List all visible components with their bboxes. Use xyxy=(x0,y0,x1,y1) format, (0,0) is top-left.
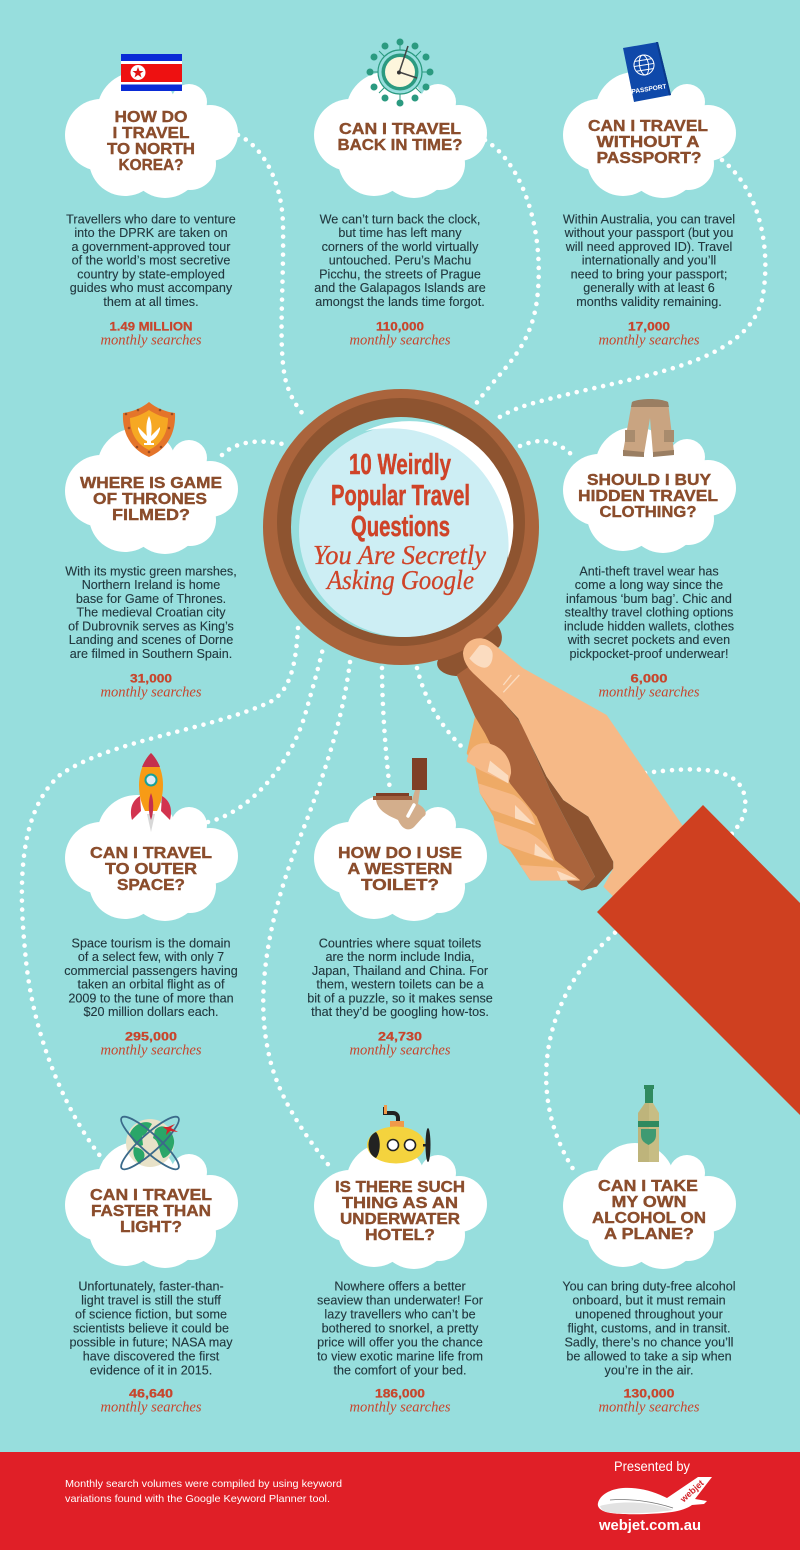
body text: untouched. Peru’s Machu xyxy=(329,254,471,268)
heading: WITHOUT A xyxy=(596,134,700,151)
cloud xyxy=(65,1142,238,1268)
red sleeve xyxy=(597,805,800,1115)
stat: 31,000 xyxy=(130,672,172,686)
handle shadow xyxy=(502,700,613,891)
body text: infamous ‘bum bag’. Chic and xyxy=(566,592,732,606)
body text: corners of the world virtually xyxy=(322,240,479,254)
heading: CAN I TRAVEL xyxy=(90,1187,212,1204)
body text: light travel is still the stuff xyxy=(81,1294,221,1308)
body text: You can bring duty-free alcohol xyxy=(562,1280,736,1294)
heading: SHOULD I BUY xyxy=(587,472,711,489)
cloud xyxy=(314,1143,487,1269)
cloud xyxy=(314,795,487,921)
icon: passport xyxy=(623,42,671,102)
heading: OF THRONES xyxy=(93,491,207,508)
body text: include hidden wallets, clothes xyxy=(564,620,734,634)
heading xyxy=(338,845,462,894)
body text: onboard, but it must remain xyxy=(572,1294,726,1308)
panel: passport xyxy=(563,42,736,348)
heading: SPACE? xyxy=(117,877,185,894)
body text xyxy=(307,936,493,1019)
heading: BACK IN TIME? xyxy=(338,137,462,154)
stat: 110,000 xyxy=(376,320,424,334)
body text: into the DPRK are taken on xyxy=(74,226,228,240)
heading xyxy=(335,1179,465,1244)
body text xyxy=(564,564,734,661)
lens highlight xyxy=(365,421,513,558)
stat: monthly searches xyxy=(598,332,700,348)
heading: TOILET? xyxy=(361,877,439,894)
body text xyxy=(64,936,238,1019)
body text xyxy=(66,212,236,309)
stat: monthly searches xyxy=(350,332,451,348)
body text: of Dubrovnik serves as King’s xyxy=(68,620,234,634)
body text: months validity remaining. xyxy=(576,295,722,309)
body text: Picchu, the streets of Prague xyxy=(319,268,481,282)
panel: outer space xyxy=(64,753,238,1058)
body text: country by state-employed xyxy=(77,268,225,282)
heading: MY OWN xyxy=(612,1194,686,1211)
stat: monthly searches xyxy=(598,684,700,700)
stat: 46,640 xyxy=(129,1386,173,1400)
body text: Unfortunately, faster-than- xyxy=(78,1280,224,1294)
icon: cargo pants xyxy=(623,399,674,457)
heading: IS THERE SUCH xyxy=(335,1179,465,1196)
body text: evidence of it in 2015. xyxy=(90,1364,212,1378)
panel: western toilet xyxy=(307,758,493,1058)
icon: shield xyxy=(123,402,175,457)
body text: With its mystic green marshes, xyxy=(65,564,237,578)
body text: We can’t turn back the clock, xyxy=(320,212,480,226)
body text: that they’d be googling how-tos. xyxy=(311,1005,489,1019)
body text: Northern Ireland is home xyxy=(82,578,220,592)
hand holding magnifying glass handle xyxy=(457,638,683,897)
icon: toilet xyxy=(373,758,427,829)
subtitle xyxy=(313,540,486,595)
stat: 130,000 xyxy=(624,1386,675,1400)
body text: a government-approved tour xyxy=(72,240,230,254)
panel: hidden clothing xyxy=(563,399,736,700)
panel: back in time xyxy=(314,38,487,348)
heading xyxy=(588,118,708,167)
body text: are the norm include India, xyxy=(325,950,475,964)
body text: unopened throughout your xyxy=(575,1308,723,1322)
body text: Space tourism is the domain xyxy=(72,936,230,950)
heading xyxy=(90,845,212,894)
stat: 24,730 xyxy=(378,1030,422,1044)
body text: without your passport (but you xyxy=(564,226,733,240)
main title: 10 Weirdly xyxy=(349,449,451,481)
heading: A PLANE? xyxy=(604,1226,694,1243)
main title: Questions xyxy=(351,511,450,543)
cloud xyxy=(65,428,238,554)
body text: generally with at least 6 xyxy=(583,281,715,295)
heading xyxy=(107,109,195,174)
body text: are filmed in Southern Spain. xyxy=(70,647,232,661)
body text: lazy travellers who can’t be xyxy=(324,1308,476,1322)
cloud xyxy=(563,1143,736,1269)
webjet url: webjet.com.au xyxy=(598,1517,701,1534)
heading: ALCOHOL ON xyxy=(592,1210,706,1227)
webjet plane logo: webjet xyxy=(678,1478,706,1505)
cloud xyxy=(65,72,238,198)
heading: WHERE IS GAME xyxy=(80,475,222,492)
body text: scientists believe it could be xyxy=(73,1322,229,1336)
stat xyxy=(100,320,202,348)
body text: them at all times. xyxy=(103,295,199,309)
cloud xyxy=(65,795,238,921)
body text: the comfort of your bed. xyxy=(333,1364,467,1378)
stat xyxy=(350,1386,451,1416)
panel: North Korea xyxy=(65,54,238,348)
stat: 17,000 xyxy=(628,320,670,334)
body text: The medieval Croatian city xyxy=(76,606,226,620)
icon: rocket xyxy=(131,753,171,832)
heading: CAN I TRAVEL xyxy=(339,121,461,138)
panel: underwater hotel xyxy=(314,1105,487,1416)
stat: 186,000 xyxy=(375,1386,425,1400)
outer rim xyxy=(263,389,539,665)
stat xyxy=(100,1030,202,1058)
stat xyxy=(350,320,451,348)
cloud xyxy=(563,72,736,198)
palm and thumb xyxy=(463,638,683,897)
panel: faster than light xyxy=(65,1111,238,1416)
stat: monthly searches xyxy=(598,1400,700,1416)
main title: Popular Travel xyxy=(331,480,470,512)
footer band xyxy=(0,1452,800,1550)
dotted connector lines xyxy=(22,135,765,1172)
body text: of a select few, with only 7 xyxy=(78,950,224,964)
body text: $20 million dollars each. xyxy=(83,1005,219,1019)
stat: monthly searches xyxy=(350,1042,451,1058)
stat: 1.49 MILLION xyxy=(110,320,192,334)
body text: have discovered the first xyxy=(83,1350,220,1364)
heading: CLOTHING? xyxy=(600,504,696,521)
body text: possible in future; NASA may xyxy=(69,1336,233,1350)
stat xyxy=(598,1386,700,1416)
body text: Japan, Thailand and China. For xyxy=(312,964,488,978)
heading: HIDDEN TRAVEL xyxy=(578,488,718,505)
heading: A WESTERN xyxy=(348,861,452,878)
body text: bit of a puzzle, so it makes sense xyxy=(307,992,493,1006)
body text: Countries where squat toilets xyxy=(319,936,481,950)
body text: them, western toilets can be a xyxy=(316,978,484,992)
heading: CAN I TAKE xyxy=(598,1178,698,1195)
heading xyxy=(578,472,718,521)
heading: THING AS AN xyxy=(342,1195,458,1212)
footnote xyxy=(65,1478,342,1505)
title xyxy=(313,449,486,595)
body text: Landing and scenes of Dorne xyxy=(69,633,233,647)
body text: bothered to snorkel, a pretty xyxy=(322,1322,479,1336)
heading: I TRAVEL xyxy=(112,125,190,142)
heading: UNDERWATER xyxy=(340,1211,460,1228)
panel: alcohol on a plane xyxy=(562,1085,736,1416)
stat xyxy=(100,672,202,700)
heading: CAN I TRAVEL xyxy=(588,118,708,135)
magnifying glass knob xyxy=(430,620,502,676)
icon: clock xyxy=(366,38,434,106)
icon: North Korean flag xyxy=(121,54,182,91)
body text: with secret pockets and even xyxy=(567,633,730,647)
knuckle lines xyxy=(503,675,519,692)
body text: base for Game of Thrones. xyxy=(76,592,226,606)
magnifying glass xyxy=(263,389,539,665)
heading: PASSPORT? xyxy=(596,150,702,167)
body text: flight, customs, and in transit. xyxy=(567,1322,731,1336)
body text: be allowed to take a sip when xyxy=(566,1350,732,1364)
heading: KOREA? xyxy=(118,157,184,174)
subtitle: You Are Secretly xyxy=(313,540,486,570)
body text xyxy=(314,212,486,309)
subtitle: Asking Google xyxy=(325,565,474,595)
body text xyxy=(317,1280,483,1378)
body text: amongst the lands time forgot. xyxy=(315,295,485,309)
heading: HOW DO xyxy=(114,109,188,126)
body text: you’re in the air. xyxy=(605,1364,693,1378)
body text: but time has left many xyxy=(338,226,462,240)
icon: globe with orbits xyxy=(116,1111,184,1175)
body text: Within Australia, you can travel xyxy=(563,212,735,226)
icon: submarine xyxy=(367,1105,430,1164)
body text: of the world’s most secretive xyxy=(72,254,230,268)
stat xyxy=(598,320,700,348)
heading xyxy=(338,121,462,154)
body text: price will offer you the chance xyxy=(317,1336,483,1350)
body text: and the Galapagos Islands are xyxy=(314,281,486,295)
body text: stealthy travel clothing options xyxy=(565,606,733,620)
body text: Nowhere offers a better xyxy=(334,1280,466,1294)
cloud xyxy=(314,72,487,198)
stat: 295,000 xyxy=(125,1030,177,1044)
body text: need to bring your passport; xyxy=(571,268,727,282)
stat: monthly searches xyxy=(100,1042,202,1058)
body text xyxy=(563,212,735,309)
heading: HOTEL? xyxy=(365,1227,435,1244)
panel: Game of Thrones xyxy=(65,402,238,700)
webjet plane logo xyxy=(598,1477,712,1514)
body text: 2009 to the tune of more than xyxy=(68,992,234,1006)
body text: Sadly, there’s no chance you’ll xyxy=(565,1336,733,1350)
body text: will need approved ID). Travel xyxy=(565,240,732,254)
body text xyxy=(562,1280,736,1378)
heading: FASTER THAN xyxy=(91,1203,211,1220)
body text xyxy=(69,1280,233,1378)
stat: monthly searches xyxy=(100,332,202,348)
body text: Anti-theft travel wear has xyxy=(579,564,719,578)
footnote: variations found with the Google Keyword Planner tool. xyxy=(65,1493,330,1505)
stat: monthly searches xyxy=(100,1400,202,1416)
body text: Travellers who dare to venture xyxy=(66,212,236,226)
heading: CAN I TRAVEL xyxy=(90,845,212,862)
stat xyxy=(350,1030,451,1058)
inner rim xyxy=(277,398,525,646)
stat: 6,000 xyxy=(630,672,668,686)
body text: guides who must accompany xyxy=(70,281,233,295)
heading xyxy=(592,1178,706,1243)
stat xyxy=(598,672,700,700)
cloud xyxy=(563,427,736,553)
body text xyxy=(65,564,237,661)
body text: come a long way since the xyxy=(575,578,723,592)
stat xyxy=(100,1386,202,1416)
heading: LIGHT? xyxy=(120,1219,182,1236)
body text: to view exotic marine life from xyxy=(317,1350,483,1364)
lens xyxy=(291,417,511,637)
thumbnail xyxy=(469,645,493,668)
footnote: Monthly search volumes were compiled by using keyword xyxy=(65,1478,342,1490)
handle xyxy=(457,660,595,891)
icon: bottle xyxy=(638,1085,659,1162)
body text: internationally and you’ll xyxy=(582,254,716,268)
body text: taken an orbital flight as of xyxy=(77,978,225,992)
heading: TO NORTH xyxy=(107,141,195,158)
heading: HOW DO I USE xyxy=(338,845,462,862)
stat: monthly searches xyxy=(350,1400,451,1416)
body text: of science fiction, but some xyxy=(75,1308,227,1322)
fingers xyxy=(467,717,580,881)
heading: TO OUTER xyxy=(105,861,197,878)
body text: commercial passengers having xyxy=(64,964,238,978)
body text: pickpocket-proof underwear! xyxy=(570,647,728,661)
heading xyxy=(80,475,222,524)
main title xyxy=(331,449,470,543)
stat: monthly searches xyxy=(100,684,202,700)
heading: FILMED? xyxy=(112,507,190,524)
heading xyxy=(90,1187,212,1236)
body text: seaview than underwater! For xyxy=(317,1294,483,1308)
icon: passport: PASSPORT xyxy=(631,83,667,96)
presented by: Presented by xyxy=(614,1459,690,1474)
